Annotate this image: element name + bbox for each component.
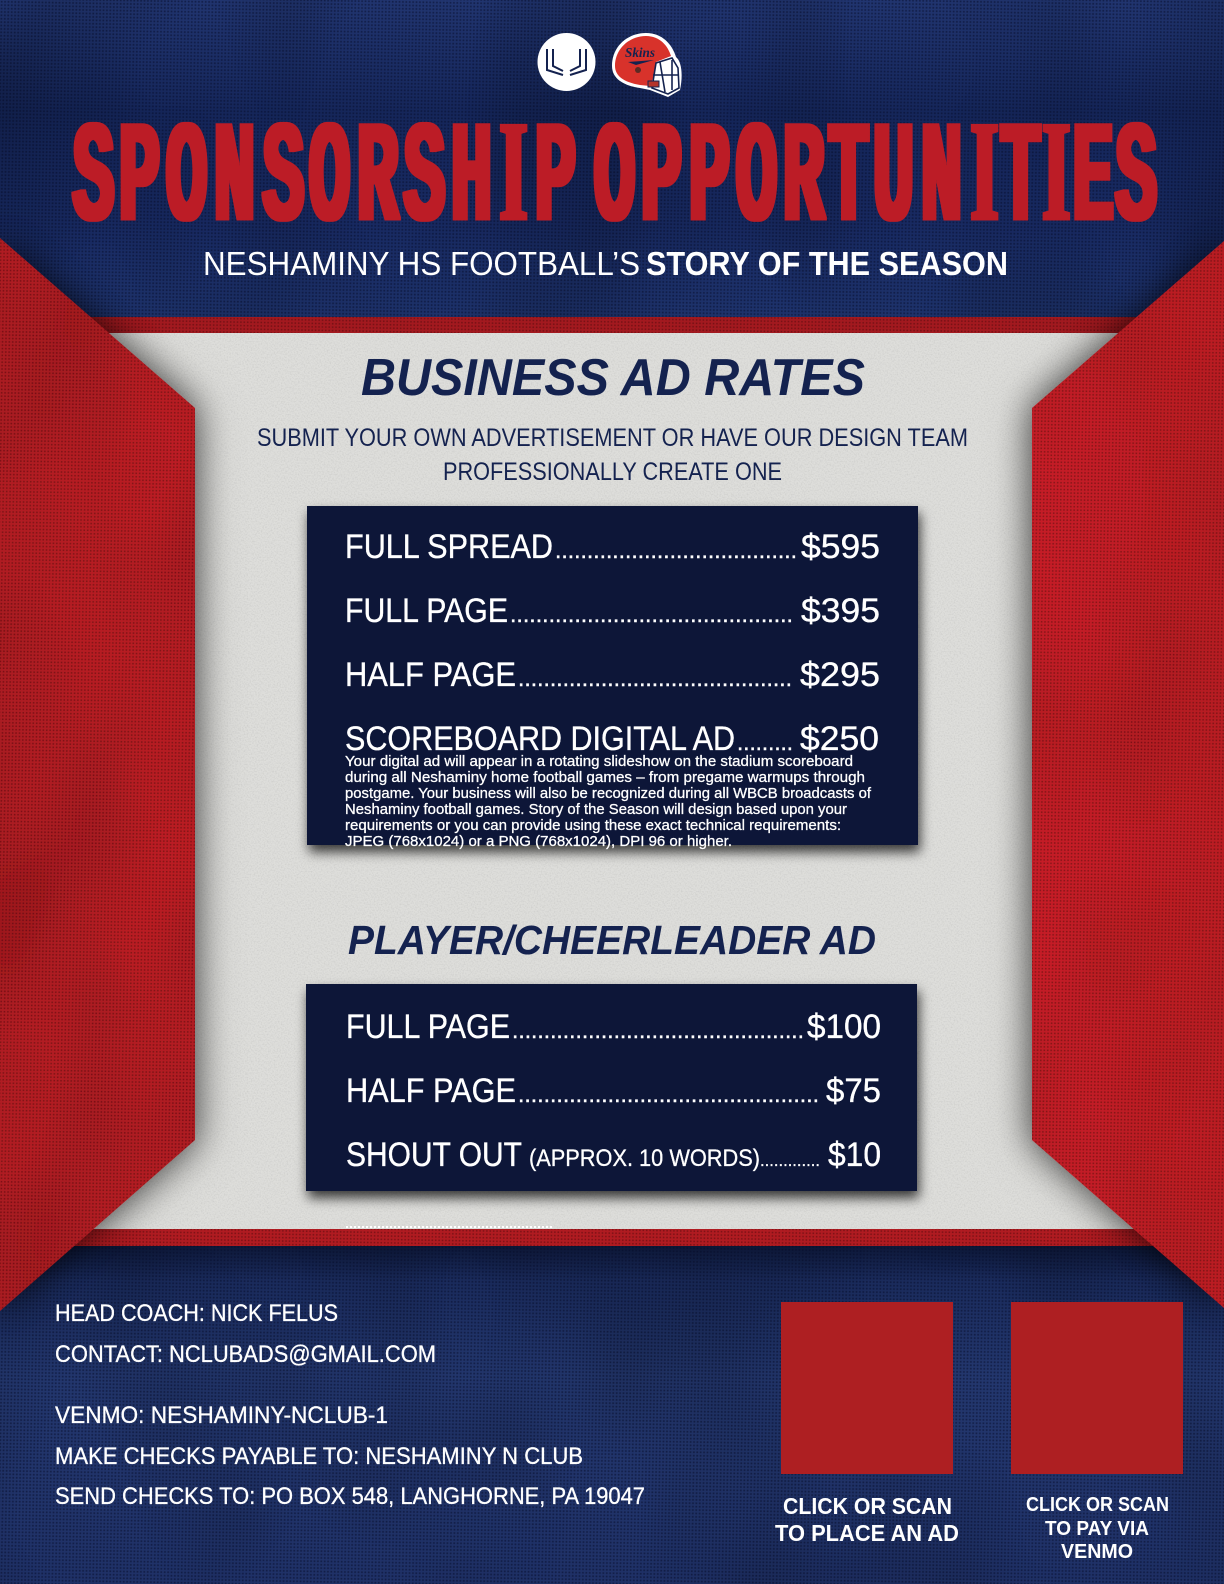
- rate: half page: $295: [800, 656, 880, 694]
- rate: player half page: $75: [826, 1072, 881, 1110]
- heading: business ad rates: BUSINESS AD RATES: [361, 349, 865, 407]
- rate: full page: [345, 592, 880, 630]
- rate: shout out: $10: [828, 1136, 881, 1174]
- payment details: [55, 1402, 645, 1510]
- rate: full page: $395: [801, 592, 880, 630]
- title: T: [1000, 100, 1042, 262]
- call to action: pay via venmo: TO PAY VIA: [1045, 1518, 1149, 1540]
- rate: full spread: $595: [801, 528, 880, 566]
- rate: scoreboard digital ad: $250: [800, 720, 879, 758]
- left red side panel: [0, 238, 195, 1311]
- intro text: [257, 424, 968, 486]
- rate: shout out: [346, 1136, 881, 1174]
- panel: light paper background: [0, 238, 1224, 1311]
- subtitle: STORY OF THE SEASON: [646, 245, 1008, 282]
- title: OPPORTUN: [593, 100, 963, 262]
- rate: player full page: $100: [807, 1008, 881, 1046]
- rate: full spread: ......................................: [555, 538, 797, 563]
- rate: full spread: [345, 528, 880, 566]
- logo: open book: [538, 33, 596, 91]
- scoreboard ad description: Your digital ad will appear in a rotating slideshow on the stadium scoreboard: [345, 753, 853, 770]
- panel: business rates table: [307, 506, 918, 850]
- rate: shout out: .............: [760, 1153, 820, 1170]
- QR placeholder: pay via venmo: [1011, 1302, 1183, 1474]
- rate: player half page: ...............................................: [518, 1082, 819, 1107]
- intro text: SUBMIT YOUR OWN ADVERTISEMENT OR HAVE OUR DESIGN TEAM: [257, 424, 968, 452]
- scoreboard ad description: during all Neshaminy home football games – from pregame warmups through: [345, 769, 865, 786]
- red stripe bottom: [60, 1229, 1164, 1246]
- title: I: [500, 93, 527, 251]
- subtitle: NESHAMINY HS FOOTBALL’S: [203, 245, 640, 282]
- title: I: [1043, 93, 1070, 251]
- rate: full page: ............................................: [510, 602, 793, 627]
- payment details: VENMO: NESHAMINY-NCLUB-1: [55, 1402, 388, 1429]
- call to action: pay via venmo: CLICK OR SCAN: [1026, 1494, 1169, 1516]
- logo: football helmet: Skins: [625, 46, 656, 61]
- contact details: [55, 1300, 436, 1368]
- title: SPONSORSH: [73, 100, 493, 262]
- title: P: [534, 100, 577, 262]
- title: ES: [1072, 100, 1157, 262]
- red stripe top: [80, 317, 1144, 334]
- panel: player rates table: [306, 984, 917, 1191]
- scoreboard ad description: postgame. Your business will also be recognized during all WBCB broadcasts of: [345, 785, 872, 802]
- scoreboard ad description: Neshaminy football games. Story of the Season will design based upon your: [345, 801, 847, 818]
- rate: full spread: FULL SPREAD: [345, 528, 553, 566]
- rate: shout out: (APPROX. 10 WORDS): [529, 1145, 760, 1172]
- call to action: place an ad: TO PLACE AN AD: [775, 1520, 959, 1546]
- rate: player half page: HALF PAGE: [346, 1072, 516, 1110]
- rate: player full page: [346, 1008, 881, 1046]
- intro text: PROFESSIONALLY CREATE ONE: [443, 458, 782, 486]
- rate: shout out: SHOUT OUT: [346, 1136, 522, 1174]
- rate: scoreboard digital ad: SCOREBOARD DIGITAL AD: [345, 720, 735, 758]
- QR placeholder: place an ad: [781, 1302, 953, 1474]
- subtitle: [203, 245, 1008, 282]
- scoreboard ad description: requirements or you can provide using these exact technical requirements:: [345, 817, 841, 834]
- rate: full page: FULL PAGE: [345, 592, 508, 630]
- payment details: SEND CHECKS TO: PO BOX 548, LANGHORNE, PA 19047: [55, 1483, 645, 1510]
- rate: player half page: [346, 1072, 881, 1110]
- payment details: MAKE CHECKS PAYABLE TO: NESHAMINY N CLUB: [55, 1443, 583, 1470]
- rate: scoreboard digital ad: .........: [737, 730, 793, 755]
- call to action: pay via venmo: [1026, 1494, 1169, 1563]
- rate: half page: HALF PAGE: [345, 656, 516, 694]
- right red side panel: [1032, 241, 1224, 1308]
- scoreboard ad description: JPEG (768x1024) or a PNG (768x1024), DPI 96 or higher.: [345, 833, 732, 850]
- heading: player/cheerleader ad: PLAYER/CHEERLEADER AD: [348, 917, 876, 963]
- scoreboard ad description: [345, 753, 872, 850]
- rate: half page: ...........................................: [518, 666, 792, 691]
- contact details: HEAD COACH: NICK FELUS: [55, 1300, 338, 1327]
- rate: half page: [345, 656, 880, 694]
- rate: player full page: ..............................................: [512, 1018, 804, 1043]
- call to action: place an ad: [775, 1493, 959, 1546]
- rate: player full page: FULL PAGE: [346, 1008, 510, 1046]
- stray dotted line: [346, 1226, 553, 1228]
- logo: football helmet: [612, 33, 682, 97]
- call to action: place an ad: CLICK OR SCAN: [783, 1493, 952, 1519]
- title: I: [971, 93, 998, 251]
- call to action: pay via venmo: VENMO: [1061, 1541, 1133, 1563]
- contact details: CONTACT: NCLUBADS@GMAIL.COM: [55, 1341, 436, 1368]
